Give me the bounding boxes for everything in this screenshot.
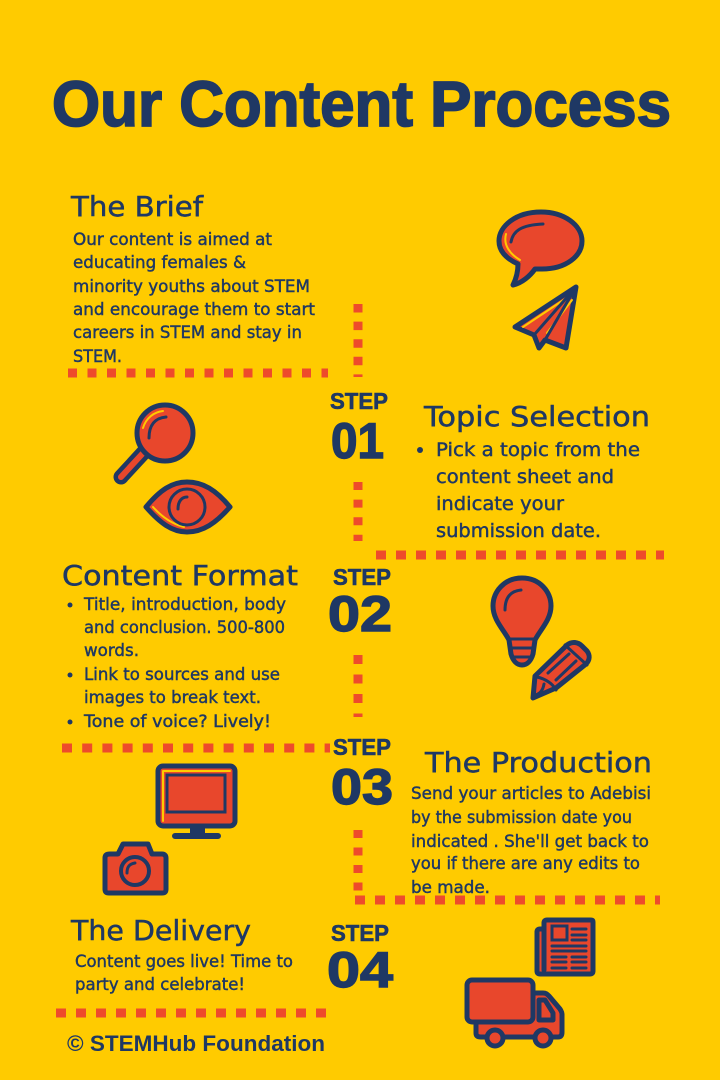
bullet list: topic selection: submission date. bbox=[436, 520, 601, 542]
panel: topic selection bbox=[417, 400, 650, 542]
bullet list: topic selection bbox=[417, 439, 640, 542]
footer credit: © STEMHub Foundation bbox=[67, 1031, 325, 1056]
step 01 label: 01 bbox=[331, 413, 384, 469]
heading: the delivery: The Delivery bbox=[70, 914, 251, 947]
bullet list: topic selection: indicate your bbox=[436, 493, 564, 515]
icon: pencil bbox=[533, 642, 589, 698]
text block: the brief: Our content is aimed at bbox=[73, 230, 272, 250]
bullet list: content format: and conclusion. 500-800 bbox=[84, 618, 285, 638]
icon: eye bbox=[146, 482, 230, 532]
step 02 label bbox=[328, 564, 392, 642]
icon: delivery truck bbox=[467, 980, 562, 1046]
bullet list: content format: Title, introduction, body bbox=[83, 595, 286, 615]
bullet list: content format bbox=[68, 595, 286, 732]
text block: the brief: educating females & bbox=[73, 253, 246, 273]
step 03 label: 03 bbox=[331, 759, 393, 815]
panel: the delivery bbox=[70, 914, 293, 995]
text block: the production: by the submission date you bbox=[411, 808, 632, 828]
bullet list: topic selection: content sheet and bbox=[436, 466, 614, 488]
icon: paper plane bbox=[515, 287, 576, 348]
text block: the production bbox=[411, 784, 651, 898]
icon: newspaper bbox=[537, 920, 593, 974]
step 03 label bbox=[331, 734, 393, 815]
step 04 label: STEP bbox=[331, 920, 389, 946]
text block: the brief: careers in STEM and stay in bbox=[73, 323, 302, 343]
step 04 label: 04 bbox=[327, 942, 393, 998]
step 01 label: STEP bbox=[330, 388, 388, 414]
bullet list: content format: Link to sources and use bbox=[84, 665, 280, 685]
icon: speech bubble bbox=[499, 212, 582, 285]
heading: content format: Content Format bbox=[62, 559, 298, 592]
icon: camera bbox=[105, 844, 166, 893]
text block: the delivery: Content goes live! Time to bbox=[75, 952, 293, 972]
step 02 label: STEP bbox=[333, 564, 391, 590]
text block: the brief: and encourage them to start bbox=[73, 300, 315, 320]
bullet list: content format: Tone of voice? Lively! bbox=[83, 712, 271, 732]
icon: light bulb bbox=[493, 578, 551, 665]
text block: the production: Send your articles to Adebisi bbox=[411, 784, 651, 804]
title: Our Content Process bbox=[52, 68, 671, 140]
step 01 label bbox=[330, 388, 388, 469]
step 02 label: 02 bbox=[328, 586, 392, 642]
text block: the production: indicated . She'll get back to bbox=[411, 832, 649, 852]
text block: the delivery: party and celebrate! bbox=[75, 975, 245, 995]
heading: topic selection: Topic Selection bbox=[423, 400, 650, 433]
step 03 label: STEP bbox=[333, 734, 391, 760]
bullet list: content format: images to break text. bbox=[84, 688, 261, 708]
text block: the brief: STEM. bbox=[73, 347, 122, 367]
heading: the brief: The Brief bbox=[70, 190, 204, 223]
step 04 label bbox=[327, 920, 393, 998]
text block: the delivery bbox=[75, 952, 293, 995]
panel: content format bbox=[62, 559, 298, 732]
heading: the production: The Production bbox=[424, 746, 652, 779]
bullet list: content format: words. bbox=[84, 641, 139, 661]
text block: the brief bbox=[73, 230, 315, 367]
icon: magnifying glass bbox=[121, 405, 193, 477]
text block: the production: be made. bbox=[411, 878, 490, 898]
panel: the brief bbox=[70, 190, 315, 367]
text block: the brief: minority youths about STEM bbox=[73, 277, 310, 297]
panel: the production bbox=[411, 746, 652, 898]
text block: the production: you if there are any edits to bbox=[411, 854, 640, 874]
icon: computer monitor bbox=[158, 766, 235, 839]
bullet list: topic selection: Pick a topic from the bbox=[436, 439, 640, 461]
